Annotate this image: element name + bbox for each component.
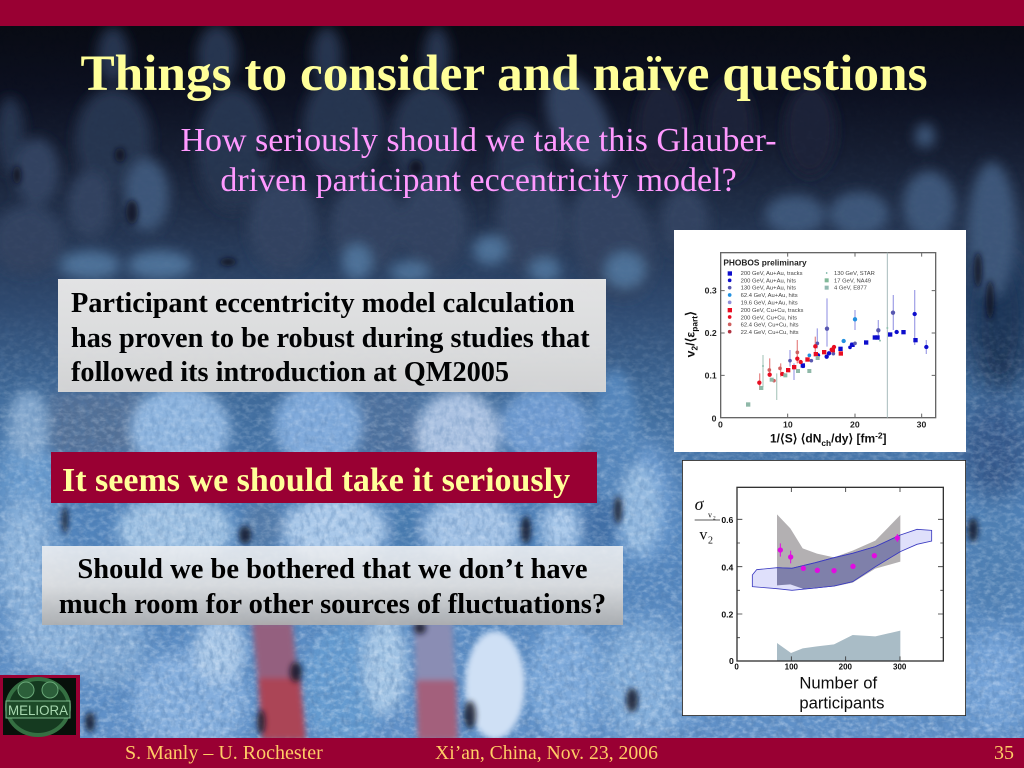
dark gaps between figures xyxy=(13,147,994,734)
text box: robustness of model: Participant eccentricity model calculation xyxy=(71,288,575,319)
y axis title: ⟩ xyxy=(684,311,698,316)
tick labels: 0.6 xyxy=(721,515,734,525)
y axis fraction label: σ xyxy=(695,494,705,514)
data points xyxy=(801,312,928,368)
y axis title: /⟨ε xyxy=(684,332,698,346)
bottom band xyxy=(777,631,900,661)
legend: 62.4 GeV, Au+Au, hits xyxy=(741,293,798,299)
error bars xyxy=(790,290,926,380)
y axis title: 2 xyxy=(689,345,699,350)
text box: question on fluctuations xyxy=(42,546,623,625)
text box: robustness of model xyxy=(58,279,606,392)
legend: 130 GeV, STAR xyxy=(834,271,875,277)
axis tick labels: 30 xyxy=(917,419,926,429)
y axis fraction label: 2 xyxy=(713,515,716,521)
lower figures xyxy=(132,650,248,750)
y axis fraction label xyxy=(695,494,720,546)
legend: 22.4 GeV, Cu+Cu, hits xyxy=(741,330,799,336)
axis tick labels: 0.1 xyxy=(705,370,717,380)
x axis title: participants xyxy=(799,693,885,712)
upper rows of dim warriors xyxy=(0,25,1016,310)
chart: relative v2 fluctuations vs participants xyxy=(682,460,966,716)
y axis fraction label: 2 xyxy=(708,535,713,546)
title: Things to consider and naïve questions xyxy=(80,45,928,102)
x axis title: ch xyxy=(821,438,831,448)
tick labels: 300 xyxy=(893,662,907,671)
tick labels: 0.2 xyxy=(721,610,734,620)
callout: take it seriously: It seems we should take it seriously xyxy=(62,462,570,499)
tick labels: 100 xyxy=(785,662,799,671)
y axis fraction label: v xyxy=(708,511,712,520)
subtitle question xyxy=(180,122,777,199)
legend: 4 GeV, E877 xyxy=(834,286,867,292)
logo: Meliora seal: MELIORA xyxy=(8,702,69,718)
y axis title: part xyxy=(689,316,699,332)
magenta data points xyxy=(778,534,900,573)
text box: question on fluctuations: Should we be bothered that we don’t have xyxy=(77,554,588,585)
tick labels xyxy=(721,515,907,671)
legend: 130 GeV, Au+Au, hits xyxy=(741,286,796,292)
x axis title: /dy⟩ [fm xyxy=(831,432,875,446)
x axis title: 1/⟨S⟩ ⟨dN xyxy=(770,432,821,446)
tick labels: 0 xyxy=(729,656,734,666)
legend: 17 GeV, NA49 xyxy=(834,278,871,284)
footer bar xyxy=(0,738,1024,768)
footer: page number: 35 xyxy=(994,742,1014,764)
legend xyxy=(723,257,875,336)
legend: 200 GeV, Au+Au, tracks xyxy=(741,271,803,277)
middle and lower rows of bright warriors xyxy=(8,370,660,750)
text box: robustness of model: has proven to be robust during studies that xyxy=(71,322,590,354)
subtitle question: How seriously should we take this Glauber- xyxy=(180,122,777,159)
x axis title: ] xyxy=(883,432,887,446)
x axis title: Number of xyxy=(799,674,877,693)
legend: 200 GeV, Cu+Cu, tracks xyxy=(741,308,804,314)
tick labels: 0.4 xyxy=(721,562,734,572)
axis tick labels: 10 xyxy=(783,419,793,429)
text box: question on fluctuations: much room for other sources of fluctuations? xyxy=(59,588,606,620)
plot frame and ticks xyxy=(737,487,943,661)
legend: 62.4 GeV, Cu+Cu, hits xyxy=(741,323,799,329)
grey systematic band xyxy=(777,514,900,589)
y axis title: v xyxy=(684,350,698,357)
top bar xyxy=(0,0,1024,26)
legend: 200 GeV, Au+Au, hits xyxy=(741,278,796,284)
text box: robustness of model: followed its introduction at QM2005 xyxy=(71,357,509,388)
blue model band xyxy=(752,529,932,590)
axis tick labels: 0 xyxy=(718,419,723,429)
legend: PHOBOS preliminary xyxy=(723,257,807,267)
x axis title xyxy=(799,674,885,712)
footer: author: S. Manly – U. Rochester xyxy=(125,742,323,764)
floor seen between the figures xyxy=(252,622,525,740)
chart: v2 over eccentricity scaling xyxy=(674,230,966,452)
legend: 19.6 GeV, Au+Au, hits xyxy=(741,300,798,306)
subtitle question: driven participant eccentricity model? xyxy=(220,162,737,199)
large tonal regions xyxy=(0,250,1024,740)
band overlap xyxy=(777,535,900,589)
footer: venue and date: Xi’an, China, Nov. 23, 2006 xyxy=(435,742,658,764)
y axis fraction label: v xyxy=(699,526,707,543)
callout: take it seriously xyxy=(51,452,597,503)
x axis title: -2 xyxy=(875,431,883,441)
tick labels: 0 xyxy=(734,662,739,671)
plot frame xyxy=(721,253,936,418)
axis tick labels: 20 xyxy=(850,419,860,429)
tick labels: 200 xyxy=(839,662,853,671)
axis tick labels: 0 xyxy=(712,413,717,423)
legend: 200 GeV, Cu+Cu, hits xyxy=(741,315,797,321)
axis tick labels xyxy=(705,286,926,429)
axis tick labels: 0.2 xyxy=(705,328,717,338)
logo: Meliora seal xyxy=(0,675,80,738)
texture of armour plates xyxy=(0,322,1024,738)
axis tick labels: 0.3 xyxy=(705,286,717,296)
